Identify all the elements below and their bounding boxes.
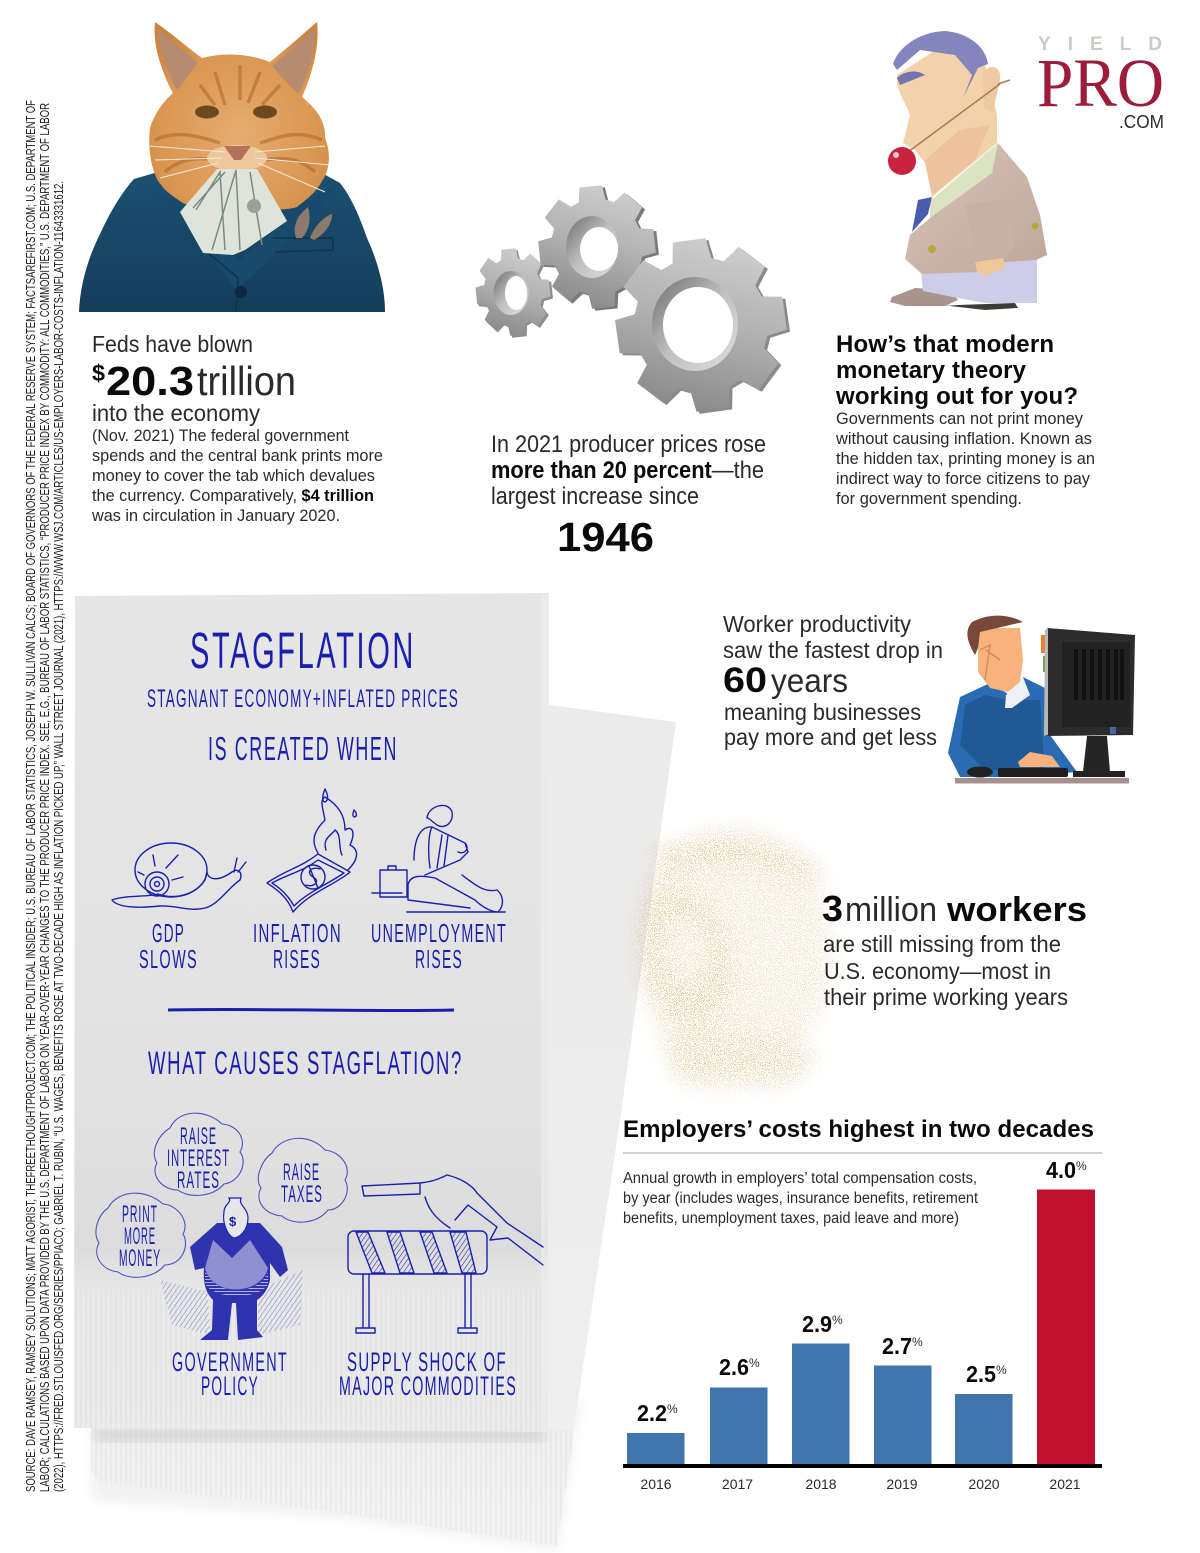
- value labels: 2.6: [719, 1354, 749, 1380]
- label: government policy: [172, 1347, 288, 1401]
- chart description: by year (includes wages, insurance benefits, retirement: [623, 1190, 979, 1207]
- illustration: frustrated worker at computer: [948, 616, 1135, 784]
- label: government policy: GOVERNMENT: [172, 1347, 288, 1377]
- chart description: Annual growth in employers’ total compensation costs,: [623, 1170, 977, 1187]
- value labels: 2.2: [637, 1400, 667, 1426]
- value labels: %: [832, 1313, 843, 1327]
- text: producer prices 1946: largest increase since: [491, 483, 699, 510]
- logo: Yield Pro .com: PRO: [1037, 45, 1164, 121]
- icon: moneybag politician: [160, 1198, 303, 1340]
- bubble: print more money: PRINT: [122, 1201, 158, 1228]
- text: 3 million workers: their prime working years: [824, 984, 1068, 1010]
- bubble: raise interest rates: RAISE: [180, 1123, 217, 1150]
- text: modern monetary theory: for government spending.: [836, 490, 1022, 508]
- label: unemployment rises: RISES: [415, 944, 463, 974]
- text: 3 million workers: are still missing from the: [823, 931, 1061, 957]
- text: worker productivity: pay more and get less: [724, 724, 937, 750]
- text: Feds have blown $20.3 trillion: 20.3: [106, 358, 194, 404]
- text: worker productivity: saw the fastest drop in: [723, 637, 943, 663]
- bubble: raise taxes: TAXES: [281, 1181, 323, 1208]
- sand texture: [635, 825, 835, 1085]
- bubble: raise taxes: [258, 1138, 347, 1222]
- text: worker productivity: meaning businesses: [724, 699, 921, 725]
- label: inflation rises: RISES: [273, 944, 321, 974]
- shadow under front napkin: [90, 1430, 545, 1440]
- value labels: %: [1076, 1159, 1087, 1173]
- text: modern monetary theory: working out for you?: [835, 383, 1078, 410]
- label: inflation rises: INFLATION: [253, 918, 342, 948]
- text: modern monetary theory: Governments can not print money: [836, 410, 1084, 428]
- large gear: [605, 229, 800, 423]
- value labels: 2.5: [966, 1361, 996, 1387]
- label: supply shock of major commodities: [339, 1347, 517, 1401]
- value labels: %: [749, 1356, 760, 1370]
- title: stagflation: IS CREATED WHEN: [208, 730, 398, 767]
- year labels: 2021: [1049, 1476, 1081, 1492]
- value labels: 2.9: [802, 1311, 832, 1337]
- text: Feds have blown $20.3 trillion: the currency. Comparatively, $4 trillion: [92, 487, 374, 505]
- text: producer prices 1946: [491, 431, 766, 560]
- label: unemployment rises: UNEMPLOYMENT: [371, 918, 507, 948]
- label: unemployment rises: [371, 918, 507, 974]
- text: Feds have blown $20.3 trillion: money to cover the tab which devalues: [92, 467, 375, 485]
- bubble: raise taxes: RAISE: [283, 1159, 320, 1186]
- label: inflation rises: [253, 918, 342, 974]
- text: Feds have blown $20.3 trillion: trillion: [197, 358, 296, 404]
- year labels: 2020: [968, 1476, 1000, 1492]
- year labels: [640, 1476, 1081, 1492]
- icon: barrier and fuel nozzle: [348, 1175, 543, 1333]
- chart heading: Employers’ costs highest in two decades: [623, 1116, 1094, 1143]
- text: 3 million workers: workers: [946, 891, 1087, 929]
- illustration: cat in a suit with money: [79, 22, 385, 312]
- text: modern monetary theory: How’s that modern: [836, 331, 1054, 358]
- bubble: raise interest rates: INTEREST: [167, 1145, 230, 1172]
- text: producer prices 1946: 1946: [557, 514, 654, 560]
- chart description: [623, 1170, 979, 1227]
- text: worker productivity: [723, 611, 943, 750]
- year labels: 2018: [805, 1476, 837, 1492]
- year labels: 2019: [886, 1476, 918, 1492]
- text: 3 million workers: U.S. economy—most in: [824, 958, 1051, 984]
- text: modern monetary theory: without causing inflation. Known as: [835, 430, 1092, 448]
- text: Feds have blown $20.3 trillion: Feds have blown: [92, 331, 253, 357]
- title: stagflation: STAGFLATION: [190, 622, 416, 679]
- bubble: print more money: MONEY: [119, 1245, 161, 1272]
- logo: Yield Pro .com: YIELD: [1038, 34, 1162, 55]
- text: 3 million workers: million: [845, 891, 937, 929]
- bubble: raise interest rates: RATES: [177, 1167, 220, 1194]
- icon: unemployed man on ground: [372, 805, 505, 912]
- chart: employers' costs by year: [623, 1116, 1102, 1492]
- title: stagflation: STAGNANT ECONOMY+INFLATED PRICES: [147, 685, 459, 713]
- front napkin panel: [74, 593, 549, 1432]
- medium gear: [533, 180, 664, 316]
- text: producer prices 1946: In 2021 producer prices rose: [491, 431, 766, 458]
- text: worker productivity: Worker productivity: [723, 611, 911, 637]
- label: GDP slows: SLOWS: [139, 944, 198, 974]
- text: Feds have blown $20.3 trillion: (Nov. 2021) The federal government: [92, 427, 349, 445]
- text: Feds have blown $20.3 trillion: into the economy: [92, 400, 260, 426]
- year labels: 2016: [640, 1476, 672, 1492]
- text: worker productivity: 60: [723, 661, 767, 700]
- value labels: %: [667, 1402, 678, 1416]
- chart description: benefits, unemployment taxes, paid leave and more): [623, 1210, 959, 1227]
- label: supply shock of major commodities: MAJOR COMMODITIES: [339, 1371, 517, 1401]
- value labels: 2.7: [882, 1333, 912, 1359]
- bubble: raise interest rates: [154, 1113, 243, 1195]
- illustration: three metal gears: [472, 180, 800, 423]
- text: 3 million workers: 3: [822, 888, 843, 929]
- back napkin: [91, 705, 676, 1550]
- icon: moneybag politician: $: [229, 1214, 237, 1229]
- label: GDP slows: GDP: [152, 918, 185, 948]
- heading: what causes stagflation: WHAT CAUSES STAGFLATION?: [148, 1045, 463, 1081]
- logo: Yield Pro .com: .COM: [1119, 112, 1164, 132]
- bubble: print more money: [96, 1193, 186, 1277]
- year labels: 2017: [722, 1476, 753, 1492]
- text: Feds have blown $20.3 trillion: was in circulation in January 2020.: [91, 507, 340, 525]
- text: worker productivity: years: [771, 662, 848, 699]
- text: modern monetary theory: indirect way to force citizens to pay: [836, 470, 1091, 488]
- text: modern monetary theory: monetary theory: [836, 357, 1027, 384]
- text: modern monetary theory: [835, 331, 1095, 508]
- source credits, rotated: [24, 100, 66, 1492]
- illustration: man with clown nose: [888, 31, 1047, 310]
- icon: burning dollar bill: [267, 789, 357, 912]
- bars: [627, 1190, 1095, 1465]
- value labels: %: [996, 1363, 1007, 1377]
- title: stagflation: [147, 622, 459, 767]
- value labels: %: [912, 1335, 923, 1349]
- label: GDP slows: [139, 918, 198, 974]
- value labels: [637, 1157, 1087, 1426]
- small gear: [472, 245, 557, 341]
- value labels: 4.0: [1046, 1157, 1076, 1183]
- bubble: print more money: MORE: [124, 1223, 156, 1250]
- text: Feds have blown $20.3 trillion: [91, 331, 383, 525]
- label: supply shock of major commodities: SUPPLY SHOCK OF: [347, 1347, 507, 1377]
- text: modern monetary theory: the hidden tax, printing money is an: [836, 450, 1095, 468]
- text: Feds have blown $20.3 trillion: $: [92, 360, 105, 386]
- label: government policy: POLICY: [201, 1371, 259, 1401]
- icon: snail: [112, 843, 246, 909]
- text: producer prices 1946: more than 20 percent—the: [491, 457, 764, 484]
- text: 3 million workers: [822, 888, 1087, 1010]
- text: Feds have blown $20.3 trillion: spends and the central bank prints more: [92, 447, 383, 465]
